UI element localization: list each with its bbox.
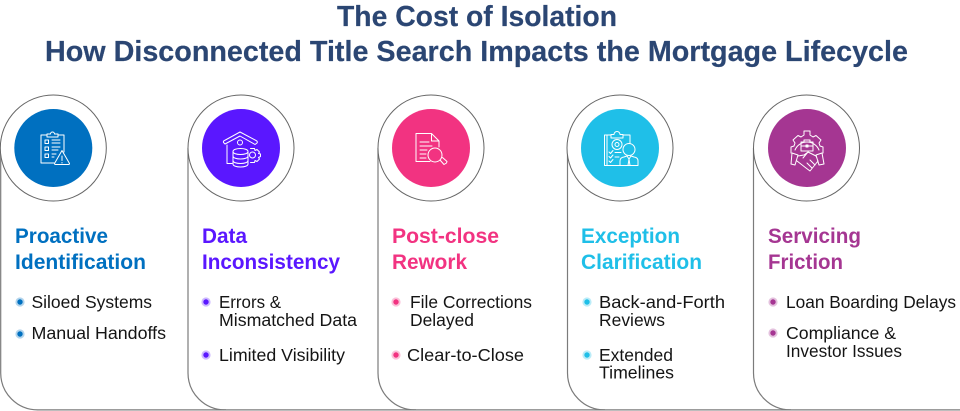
heading bbox=[768, 224, 861, 274]
bullet list: Timelines bbox=[599, 362, 674, 382]
bullet list: Loan Boarding Delays bbox=[786, 292, 956, 312]
bullet list bbox=[582, 292, 725, 382]
bullet list: Errors & bbox=[219, 292, 282, 312]
bullet list: Siloed Systems bbox=[32, 292, 152, 312]
bullet list: Manual Handoffs bbox=[32, 323, 166, 343]
bullet list: Mismatched Data bbox=[219, 310, 357, 330]
heading: Proactive bbox=[15, 224, 108, 248]
bullet list: Extended bbox=[599, 345, 673, 365]
bullet list: Compliance & bbox=[786, 323, 897, 343]
heading bbox=[581, 224, 702, 274]
bullet list bbox=[768, 292, 956, 361]
heading: Inconsistency bbox=[202, 250, 340, 274]
title: The Cost of Isolation bbox=[337, 1, 617, 33]
title: How Disconnected Title Search Impacts the Mortgage Lifecycle bbox=[45, 36, 908, 68]
bullet list: Investor Issues bbox=[786, 341, 902, 361]
bullet list: Reviews bbox=[599, 310, 665, 330]
bullet list bbox=[15, 292, 166, 343]
bullet list bbox=[391, 292, 532, 365]
bullet list bbox=[201, 292, 357, 365]
icon: clipboard with person bbox=[581, 109, 659, 187]
icon: clipboard with warning bbox=[14, 109, 92, 187]
icon: house with database and gear bbox=[202, 109, 280, 187]
panel: post-close rework bbox=[378, 95, 605, 410]
bullet list: Delayed bbox=[410, 310, 474, 330]
icon: document with magnifier bbox=[392, 109, 470, 187]
panel: exception clarification bbox=[567, 95, 791, 410]
heading: Identification bbox=[15, 250, 146, 274]
bullet list: Back-and-Forth bbox=[599, 292, 725, 312]
heading bbox=[392, 224, 499, 274]
heading bbox=[202, 224, 340, 274]
heading bbox=[15, 224, 146, 274]
heading: Servicing bbox=[768, 224, 861, 248]
panel: proactive identification bbox=[0, 95, 226, 410]
icon: gear, briefcase and handshake bbox=[768, 109, 846, 187]
bullet list: Clear-to-Close bbox=[407, 345, 524, 365]
heading: Rework bbox=[392, 250, 467, 274]
title bbox=[45, 1, 908, 68]
panel: servicing friction bbox=[754, 95, 960, 410]
bullet list: Limited Visibility bbox=[219, 345, 345, 365]
heading: Friction bbox=[768, 250, 843, 274]
heading: Data bbox=[202, 224, 248, 248]
heading: Exception bbox=[581, 224, 680, 248]
panel: data inconsistency bbox=[188, 95, 416, 410]
heading: Clarification bbox=[581, 250, 702, 274]
bullet list: File Corrections bbox=[410, 292, 532, 312]
heading: Post-close bbox=[392, 224, 499, 248]
